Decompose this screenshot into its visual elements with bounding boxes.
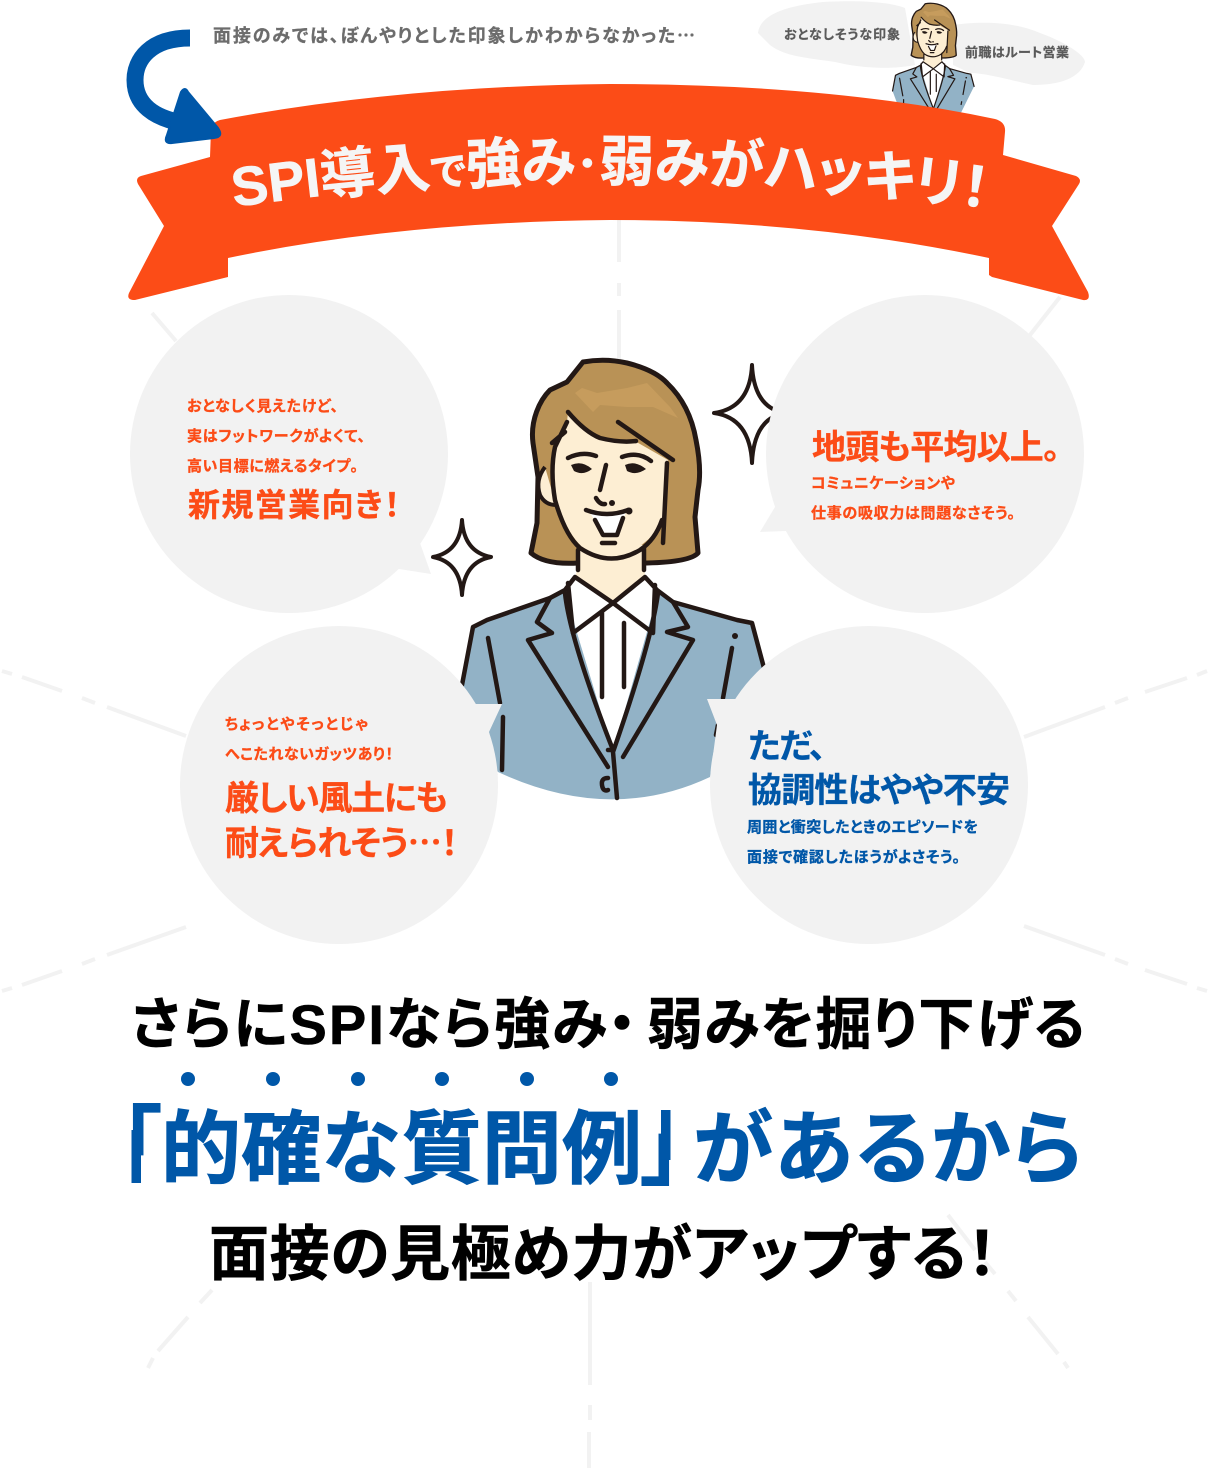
- main woman illustration: [462, 360, 764, 799]
- bubble: bottom right: 周囲と衝突したときのエピソードを: [747, 818, 978, 836]
- bubble: bottom left: ちょっとやそっとじゃ: [225, 716, 368, 733]
- bubble: bottom right: 面接で確認したほうがよさそう。: [747, 848, 960, 866]
- headline line 2: 「: [121, 1100, 161, 1189]
- bubble: bottom right: [707, 626, 1028, 944]
- bubble: top left: 新規営業向き！: [188, 487, 400, 523]
- bubble: bottom left: 耐えられそう…！: [225, 816, 458, 865]
- bubble: bottom right: 協調性はやや不安: [748, 772, 1010, 810]
- sparkle left: [433, 520, 491, 595]
- bubble: bottom right: ただ、: [748, 728, 826, 766]
- headline line 2: 」: [641, 1106, 681, 1195]
- small woman with impression clouds: [758, 1, 1085, 122]
- intro text: 面接のみでは、ぼんやりとした印象しかわからなかった…: [213, 22, 695, 48]
- bubble: top right: 仕事の吸収力は問題なさそう。: [811, 504, 1015, 522]
- headline line 3: 面接の見極め力がアップする！: [209, 1221, 997, 1288]
- emphasis dots: [181, 1072, 618, 1086]
- bubble: bottom left: 厳しい風土にも: [225, 780, 448, 818]
- bubble: top right: コミュニケーションや: [811, 475, 955, 492]
- ribbon banner: [128, 84, 1089, 300]
- bubble: top left: おとなしく見えたけど、: [187, 398, 338, 415]
- bubble: top left: [130, 295, 448, 613]
- bubble: top left: 高い目標に燃えるタイプ。: [187, 457, 358, 475]
- headline line 1: [131, 993, 1085, 1056]
- bubble: bottom left: [180, 626, 502, 944]
- headline line 2: があるから: [693, 1105, 1082, 1194]
- banner headline: SPI導入で強み･弱みがハッキリ！: [233, 136, 984, 208]
- headline line 2: [121, 1100, 1082, 1195]
- sparkle right: [714, 365, 785, 463]
- bubble: top right: 地頭も平均以上。: [812, 429, 1060, 467]
- small woman with impression clouds: おとなしそうな印象: [784, 27, 900, 42]
- bubble: bottom left: へこたれないガッツあり！: [225, 746, 393, 763]
- small woman with impression clouds: 前職はルート営業: [965, 45, 1069, 60]
- headline line 1: さらにSPIなら強み: [131, 993, 607, 1056]
- blue curved arrow: [135, 38, 220, 143]
- bubble: top left: 実はフットワークがよくて、: [187, 427, 365, 445]
- headline line 1: 弱みを掘り下げる: [647, 993, 1085, 1056]
- bubble: top right: [760, 295, 1084, 613]
- headline line 1: ・: [594, 993, 650, 1056]
- headline line 2: 的確な質問例: [161, 1105, 642, 1194]
